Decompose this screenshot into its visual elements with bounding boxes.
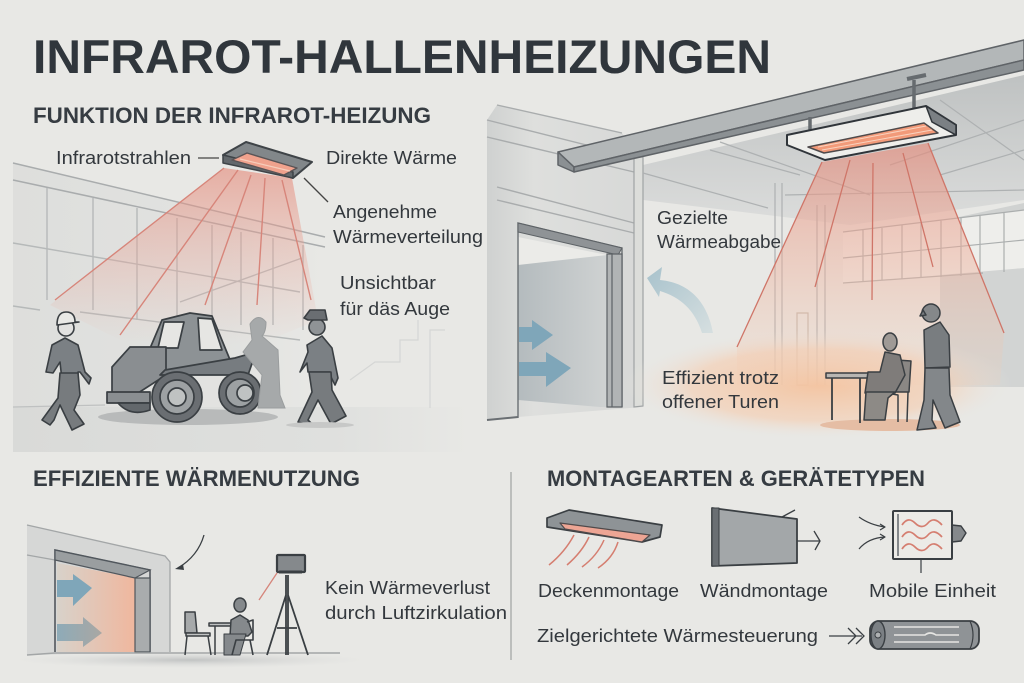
beam glow xyxy=(623,143,1013,440)
hall background xyxy=(13,163,470,452)
label: Kein Wärmeverlust: Kein Wärmeverlust xyxy=(325,577,490,598)
standing person xyxy=(917,304,960,430)
label: Zielgerichtete Wärmesteuerung: Zielgerichtete Wärmesteuerung xyxy=(537,625,818,646)
label: Gezielte Wärmeabgabe: Wärmeabgabe xyxy=(657,231,781,252)
curved air arrow xyxy=(647,267,713,333)
shadow under people xyxy=(820,419,960,431)
label: Infrarotstrahlen: Infrarotstrahlen xyxy=(56,147,191,168)
heading: Effiziente: EFFIZIENTE WÄRMENUTZUNG xyxy=(33,466,360,491)
infrared beams xyxy=(50,168,318,345)
arrows in door xyxy=(519,320,571,387)
ceiling heater large xyxy=(787,75,956,160)
door wall xyxy=(27,525,340,655)
arrow xyxy=(829,628,864,644)
icon: tube heater xyxy=(870,621,979,649)
worker right xyxy=(298,310,346,426)
worker shadow xyxy=(286,422,354,428)
panel: Montagearten xyxy=(537,466,996,649)
floor shadow xyxy=(15,652,365,668)
label: Direkte Wärme: Direkte Wärme xyxy=(326,147,457,168)
heading: Funktion: FUNKTION DER INFRAROT-HEIZUNG xyxy=(33,103,431,128)
label: Mobile Einheit: Mobile Einheit xyxy=(869,580,996,601)
title: INFRAROT-HALLENHEIZUNGEN xyxy=(33,30,771,83)
heading: Montagearten: MONTAGEARTEN & GERÄTETYPEN xyxy=(547,466,925,491)
panel: Effiziente Wärmenutzung xyxy=(15,466,507,668)
label: Unsichtbar xyxy=(340,272,450,319)
vehicle xyxy=(107,313,261,422)
door xyxy=(487,223,622,420)
label: Wandmontage: Wändmontage xyxy=(700,580,828,601)
panel: Funktion der Infrarot-Heizung xyxy=(13,103,483,452)
worker left xyxy=(42,312,91,430)
table scene xyxy=(185,598,253,655)
hall structure xyxy=(487,75,1024,420)
label: Kein Wärmeverlust: durch Luftzirkulation xyxy=(325,602,507,623)
icon: mobile unit xyxy=(859,511,966,573)
icon: ceiling heater xyxy=(223,142,312,178)
label: Gezielte Wärmeabgabe xyxy=(657,207,781,252)
label: Effizient trotz offener Turen: offener Turen xyxy=(662,391,779,412)
desk and seated person xyxy=(826,333,911,423)
arrows xyxy=(57,574,102,647)
ghost figure xyxy=(243,317,285,408)
label: Kein Wärmeverlust xyxy=(325,577,507,623)
curved line xyxy=(175,535,204,570)
label: Unsichtbar: für däs Auge xyxy=(340,298,450,319)
label: Deckenmontage: Deckenmontage xyxy=(538,580,679,601)
divider xyxy=(510,472,512,660)
icon: wall mount xyxy=(712,508,820,566)
panel: hall with doors xyxy=(487,40,1024,440)
label: Gezielte Wärmeabgabe: Gezielte xyxy=(657,207,728,228)
icon: ceiling mount xyxy=(547,510,662,568)
label: Unsichtbar: Unsichtbar xyxy=(340,272,436,293)
label: Effizient trotz offener Turen xyxy=(662,367,779,412)
ceiling beam xyxy=(558,40,1024,172)
label: Angenehme Wärmeverteilung xyxy=(333,201,483,247)
label: Angenehme Wärmeverteilung: Wärmeverteilung xyxy=(333,226,483,247)
label: Angenehme Wärmeverteilung: Angenehme xyxy=(333,201,437,222)
label: Effizient trotz offener Turen: Effizient trotz xyxy=(662,367,779,388)
floor shadow xyxy=(98,409,278,425)
icon: tripod heater xyxy=(259,555,308,655)
